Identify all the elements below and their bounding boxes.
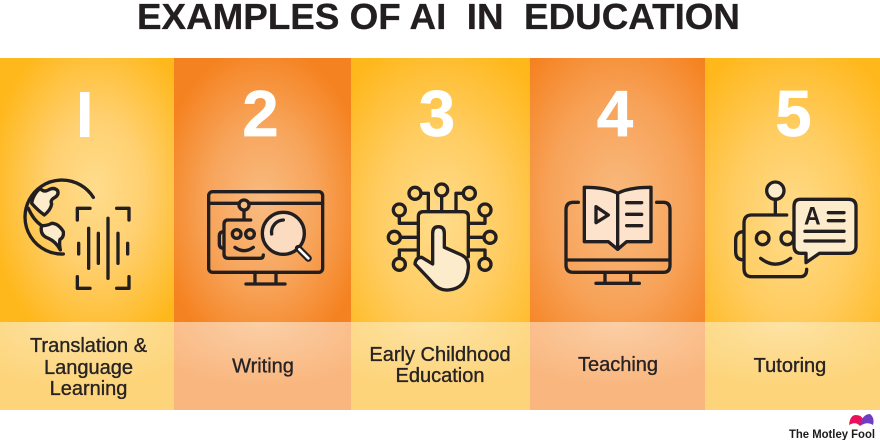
number 4: 4 [597,77,633,150]
label: Translation & [30,335,148,357]
panel: teaching [530,58,705,410]
panel: tutoring [705,58,880,410]
label: Learning [50,378,127,400]
panel: translation and language learning [0,58,174,410]
label: Early Childhood [369,344,511,366]
logo: The Motley Fool [789,414,875,440]
number 1: 1 [66,77,103,150]
number 5: 5 [775,77,812,150]
number 2: 2 [242,77,279,150]
icon: hand touching circuit [388,184,496,290]
number 1 [80,92,90,137]
number 3: 3 [419,77,455,150]
label: Writing [232,356,294,378]
icon: monitor with open book [566,187,670,283]
label: Language [44,357,133,379]
icon: globe and voice waveform [25,180,129,288]
label: Teaching [578,354,658,376]
icon: robot with speech bubble [736,182,856,277]
icon: monitor with robot and magnifier [209,192,323,284]
label: Tutoring [754,355,826,377]
icon: jester hat [849,414,874,426]
label: Education [396,365,484,387]
icon: robot with speech bubble: A [804,203,821,231]
panel: writing [174,58,351,410]
panel: early childhood education [351,58,530,410]
